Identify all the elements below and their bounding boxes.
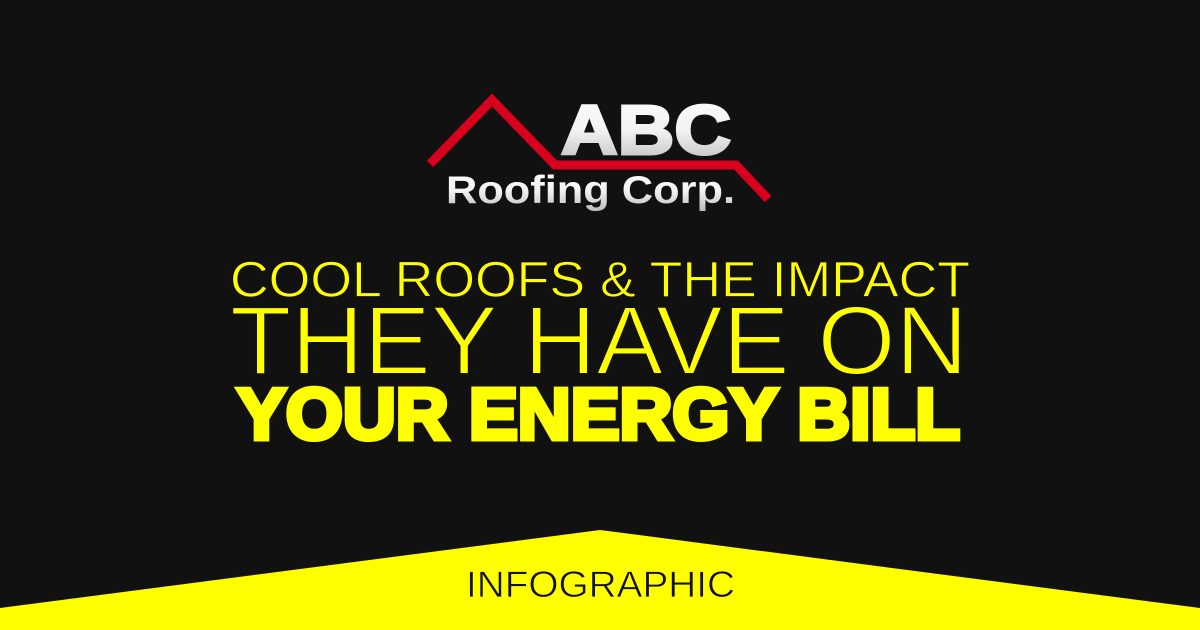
banner roof shape — [0, 530, 1200, 630]
logo roof line — [430, 100, 768, 199]
banner label: INFOGRAPHIC — [466, 564, 735, 605]
bottom banner — [0, 530, 1200, 630]
logo wordmark ABC: ABC — [561, 91, 731, 169]
title — [230, 252, 970, 455]
title line 2: THEY HAVE ON — [230, 286, 968, 395]
logo: ABC Roofing Corp. — [430, 91, 768, 212]
title line 1: COOL ROOFS & THE IMPACT — [230, 252, 970, 308]
logo wordmark Roofing Corp.: Roofing Corp. — [446, 169, 735, 212]
title line 3: YOUR ENERGY BILL — [237, 375, 960, 455]
